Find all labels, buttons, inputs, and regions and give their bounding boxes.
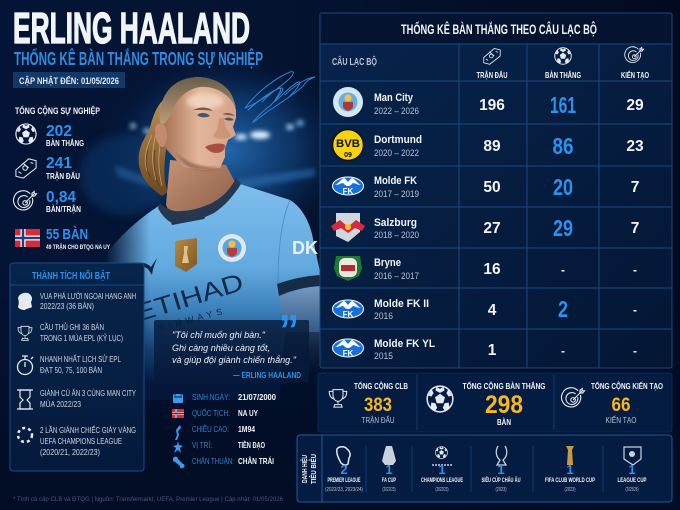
column header: assists: KIẾN TẠO (621, 70, 649, 80)
gold badge (175, 238, 197, 272)
neck (166, 160, 236, 222)
column header: goals (545, 48, 581, 80)
achievement: golden boot: 2022/23 (36 BÀN) (40, 301, 94, 311)
nose (213, 118, 230, 139)
logo: Salzburg (331, 213, 365, 242)
row: Molde FK (332, 174, 639, 200)
total matches: TỔNG CỘNG CLB (354, 380, 408, 391)
national team stat (46, 226, 110, 251)
row: Man City: 29 (626, 97, 644, 114)
nationality: QUỐC TỊCH: (192, 407, 230, 418)
career totals (13, 105, 110, 251)
trophy: club world cup: 1 (566, 462, 574, 477)
arm (280, 284, 320, 372)
DK sleeve logo: DK (292, 238, 318, 258)
trophy: premier league: 2 (340, 462, 348, 477)
update date badge (13, 72, 125, 88)
side label: TIÊU BIỂU (309, 454, 318, 484)
preferred foot: CHÂN THUẬN: (192, 456, 234, 466)
panel: totals summary (318, 373, 672, 432)
row: Man City: 2022 – 2026 (374, 106, 419, 116)
trophy: club world cup: (2023) (564, 487, 576, 493)
row: Molde FK II (332, 296, 637, 322)
achievement: record (40, 321, 123, 343)
matches stat (46, 155, 80, 181)
player photo (105, 77, 320, 402)
row: Salzburg: Salzburg (374, 217, 417, 229)
logo: Molde: FK (343, 349, 354, 358)
quote panel (154, 306, 309, 383)
ratio stat (46, 189, 81, 214)
row: Dortmund: 86 (552, 133, 574, 159)
row: Bryne: 16 (483, 261, 501, 278)
row: Molde FK: 2017 – 2019 (374, 189, 419, 199)
matches stat: 241 (46, 155, 72, 172)
row: Molde FK YL: - (561, 344, 565, 358)
icon: stopwatch (18, 356, 33, 374)
total assists: 66 (612, 395, 630, 416)
icon: height (175, 425, 181, 440)
icon: target (13, 191, 37, 210)
achievement: champions league: UEFA CHAMPIONS LEAGUE (40, 437, 122, 446)
personal facts (172, 392, 276, 468)
trophy: league cup: (2025/26) (626, 487, 639, 493)
face shadow (176, 152, 220, 170)
panel: trophies (297, 435, 672, 502)
column header: club: CÂU LẠC BỘ (332, 55, 377, 68)
trophy: league cup (618, 447, 647, 493)
trophy: fa cup: (2022/23) (382, 487, 396, 493)
trophy: premier league (325, 447, 363, 493)
nationality: NA UY (238, 409, 258, 418)
total matches (354, 380, 408, 425)
row: Bryne: 2016 – 2017 (374, 271, 419, 281)
ratio stat: BÀN/TRẬN (46, 203, 81, 214)
mouth (205, 144, 225, 153)
ratio stat: 0,84 (46, 189, 76, 206)
row: Man City: 161 (550, 92, 576, 118)
footnote: * Tính cả cấp CLB và ĐTQG | Nguồn: Transfermarkt, UEFA, Premier League | Cập nhật: 01/05/2026 (13, 494, 283, 503)
icon: flag (172, 409, 184, 418)
icon: football (16, 124, 36, 144)
logo: Molde (332, 339, 364, 358)
trophy: champions league: (2022/23) (436, 487, 449, 493)
quote attribution: — ERLING HAALAND (233, 370, 301, 380)
row: Molde FK II: - (633, 303, 637, 317)
eyes (197, 113, 234, 121)
trophy: club world cup (545, 446, 595, 493)
trophy: super cup (482, 446, 521, 493)
achievement: record: CẦU THỦ GHI 36 BÀN (40, 321, 104, 332)
logo: Molde (332, 177, 364, 196)
trophy: super cup: 1 (497, 462, 505, 477)
logo: Molde: FK (343, 187, 354, 196)
birth date (192, 392, 276, 402)
position (192, 440, 265, 450)
icon: pitch (16, 159, 36, 178)
trophy: club world cup: FIFA CLUB WORLD CUP (545, 477, 595, 484)
achievement: golden boot: VUA PHÁ LƯỚI NGOẠI HẠNG ANH (40, 291, 136, 301)
position: TIỀN ĐẠO (238, 440, 265, 450)
ear (155, 124, 167, 147)
title: ERLING HAALAND (13, 4, 250, 53)
sleeve seam (278, 200, 290, 284)
side label (300, 454, 318, 484)
achievement: champions league (40, 425, 136, 457)
column header: goals: BÀN THẮNG (545, 70, 581, 80)
row: Bryne: Bryne (374, 257, 401, 269)
trophy: fa cup: 1 (385, 462, 393, 477)
row: Molde FK YL: - (633, 344, 637, 358)
icon: champions league ball (18, 428, 32, 442)
achievement: fastest: NHANH NHẤT LỊCH SỬ EPL (40, 353, 121, 364)
career heading: TỔNG CỘNG SỰ NGHIỆP (15, 105, 100, 117)
achievement: treble (40, 388, 136, 409)
position: VỊ TRÍ: (192, 440, 212, 450)
row: Man City: Man City (374, 92, 414, 104)
total assists (591, 380, 663, 425)
icon: treble (17, 390, 33, 409)
trophy: premier league: PREMIER LEAGUE (328, 477, 361, 484)
trophy: fa cup: FA CUP (382, 477, 396, 484)
preferred foot (192, 455, 274, 466)
row: Molde FK II: Molde FK II (374, 298, 429, 310)
trophy: champions league: CHAMPIONS LEAGUE (421, 477, 463, 484)
row: Molde FK II: 4 (488, 302, 497, 319)
row: Molde FK II: 2016 (374, 311, 393, 321)
trophy: super cup: SIÊU CÚP CHÂU ÂU (482, 475, 521, 484)
subtitle: THỐNG KÊ BÀN THẮNG TRONG SỰ NGHIỆP (14, 48, 263, 69)
icon: calendar (173, 392, 183, 403)
achievement: treble: MÙA 2022/23 (40, 399, 81, 409)
icon: norway flag (15, 229, 40, 247)
city crest (218, 234, 246, 262)
hair top (160, 77, 236, 124)
total matches: TRẬN ĐẤU (362, 415, 395, 425)
trophy: super cup: (2023) (496, 487, 507, 493)
quote text (172, 330, 297, 365)
total goals: 298 (485, 391, 523, 419)
airways sponsor: AIRWAYS (158, 306, 223, 333)
row: Molde FK YL: 2015 (374, 351, 393, 361)
icon: football (427, 386, 453, 412)
achievement: golden boot (40, 291, 136, 311)
achievement: champions league: (2020/21, 2022/23) (40, 448, 100, 457)
side label: DANH HIỆU (300, 455, 309, 483)
icon: trophy (329, 390, 347, 407)
icon: trophy (18, 326, 32, 340)
stadium background (80, 50, 355, 250)
quote mark: ” (279, 306, 299, 355)
trophy: premier league: (2022/23, 2023/24) (325, 487, 363, 493)
icon: position (173, 441, 183, 453)
logo: Molde (332, 300, 364, 319)
quote text: Ghi càng nhiều càng tốt, (172, 343, 270, 353)
total goals (462, 380, 546, 427)
logo: Molde: FK (343, 310, 354, 319)
logo: Bryne (334, 256, 362, 281)
achievement: record: TRONG 1 MÙA EPL (KỶ LỤC) (40, 332, 123, 343)
height: CHIỀU CAO: (192, 424, 229, 434)
total goals: TỔNG CỘNG BÀN THẮNG (462, 380, 546, 391)
shirt inner neckline (170, 210, 210, 225)
achievement: fastest: ĐẠT 50, 75, 100 BÀN (40, 365, 102, 375)
panel: achievements (10, 263, 144, 471)
preferred foot: CHÂN TRÁI (238, 455, 274, 466)
quote text: và giúp đội giành chiến thắng." (172, 355, 297, 365)
icon: foot (173, 457, 184, 468)
row: Molde FK YL: Molde FK YL (374, 338, 435, 350)
row: Man City (333, 87, 644, 118)
column header: assists (621, 47, 649, 80)
forehead highlight (186, 93, 224, 109)
row: Bryne: - (633, 263, 637, 277)
goals stat: 202 (46, 123, 72, 140)
trophy: league cup: 1 (628, 462, 636, 477)
row: Dortmund: Dortmund (374, 134, 422, 146)
row: Man City: 196 (479, 97, 505, 114)
national team stat: 49 TRẬN CHO ĐTQG NA UY (46, 244, 110, 251)
row: Bryne: - (561, 263, 565, 277)
row: Salzburg (331, 213, 639, 242)
sleeve band (277, 275, 320, 296)
column header: matches: TRẬN ĐẤU (476, 69, 508, 80)
row: Molde FK YL: 1 (488, 342, 497, 359)
row: Molde FK: 7 (631, 179, 639, 196)
achievement: fastest (40, 353, 121, 375)
quote text: "Tôi chỉ muốn ghi bàn." (172, 330, 266, 340)
height: 1M94 (238, 425, 255, 434)
update date badge: CẬP NHẬT ĐẾN: 01/05/2026 (19, 75, 119, 87)
trophy: champions league (421, 447, 463, 493)
collar (158, 178, 241, 223)
row: Molde FK YL (332, 338, 637, 361)
row: Dortmund (332, 130, 644, 160)
goals stat (46, 123, 84, 148)
achievement: champions league: 2 LẦN GIÀNH CHIẾC GIÀY VÀNG (40, 425, 136, 435)
row: Dortmund: 89 (483, 138, 501, 155)
ponytail hair (139, 100, 168, 196)
nationality (192, 407, 258, 418)
trophy: fa cup (382, 446, 396, 493)
birth date: SINH NGÀY: (192, 392, 230, 402)
logo: Dortmund (332, 130, 364, 160)
row: Salzburg: 7 (631, 220, 639, 237)
row: Salzburg: 27 (483, 220, 501, 237)
column header: matches (476, 48, 508, 80)
trophy: champions league: 1 (438, 462, 446, 477)
logo: Dortmund: 09 (344, 152, 352, 159)
matches stat: TRẬN ĐẤU (46, 170, 80, 181)
head (160, 77, 236, 170)
icon: target (561, 388, 585, 407)
total assists: KIẾN TẠO (606, 415, 636, 425)
logo: Dortmund: BVB (336, 138, 360, 150)
birth date: 21/07/2000 (238, 393, 276, 402)
achievement: treble: GIÀNH CÚ ĂN 3 CÙNG MAN CITY (40, 388, 136, 398)
row: Dortmund: 2020 – 2022 (374, 148, 419, 158)
row: Molde FK II: 2 (558, 296, 568, 322)
row: Molde FK: Molde FK (374, 175, 417, 187)
row: Molde FK: 50 (483, 179, 501, 196)
logo: Man City (333, 87, 363, 117)
panel: club statistics table (320, 13, 672, 368)
row: Salzburg: 29 (553, 215, 573, 241)
row: Dortmund: 23 (626, 138, 644, 155)
height (192, 424, 255, 434)
national team stat: 55 BÀN (46, 226, 88, 243)
puma logo (138, 258, 157, 275)
total matches: 383 (364, 395, 392, 416)
total goals: BÀN (497, 418, 511, 427)
row: Bryne (334, 256, 637, 281)
trophy: league cup: LEAGUE CUP (618, 477, 647, 484)
shirt body (105, 183, 320, 402)
etihad sponsor: ETIHAD (132, 268, 247, 328)
row: Salzburg: 2018 – 2020 (374, 230, 419, 240)
brows (193, 107, 235, 116)
signature (245, 72, 315, 123)
goals stat: BÀN THẮNG (46, 138, 84, 148)
row: Molde FK: 20 (553, 174, 573, 200)
icon: premier league lion (18, 293, 32, 310)
achievements heading: THÀNH TÍCH NỔI BẬT (32, 269, 110, 282)
